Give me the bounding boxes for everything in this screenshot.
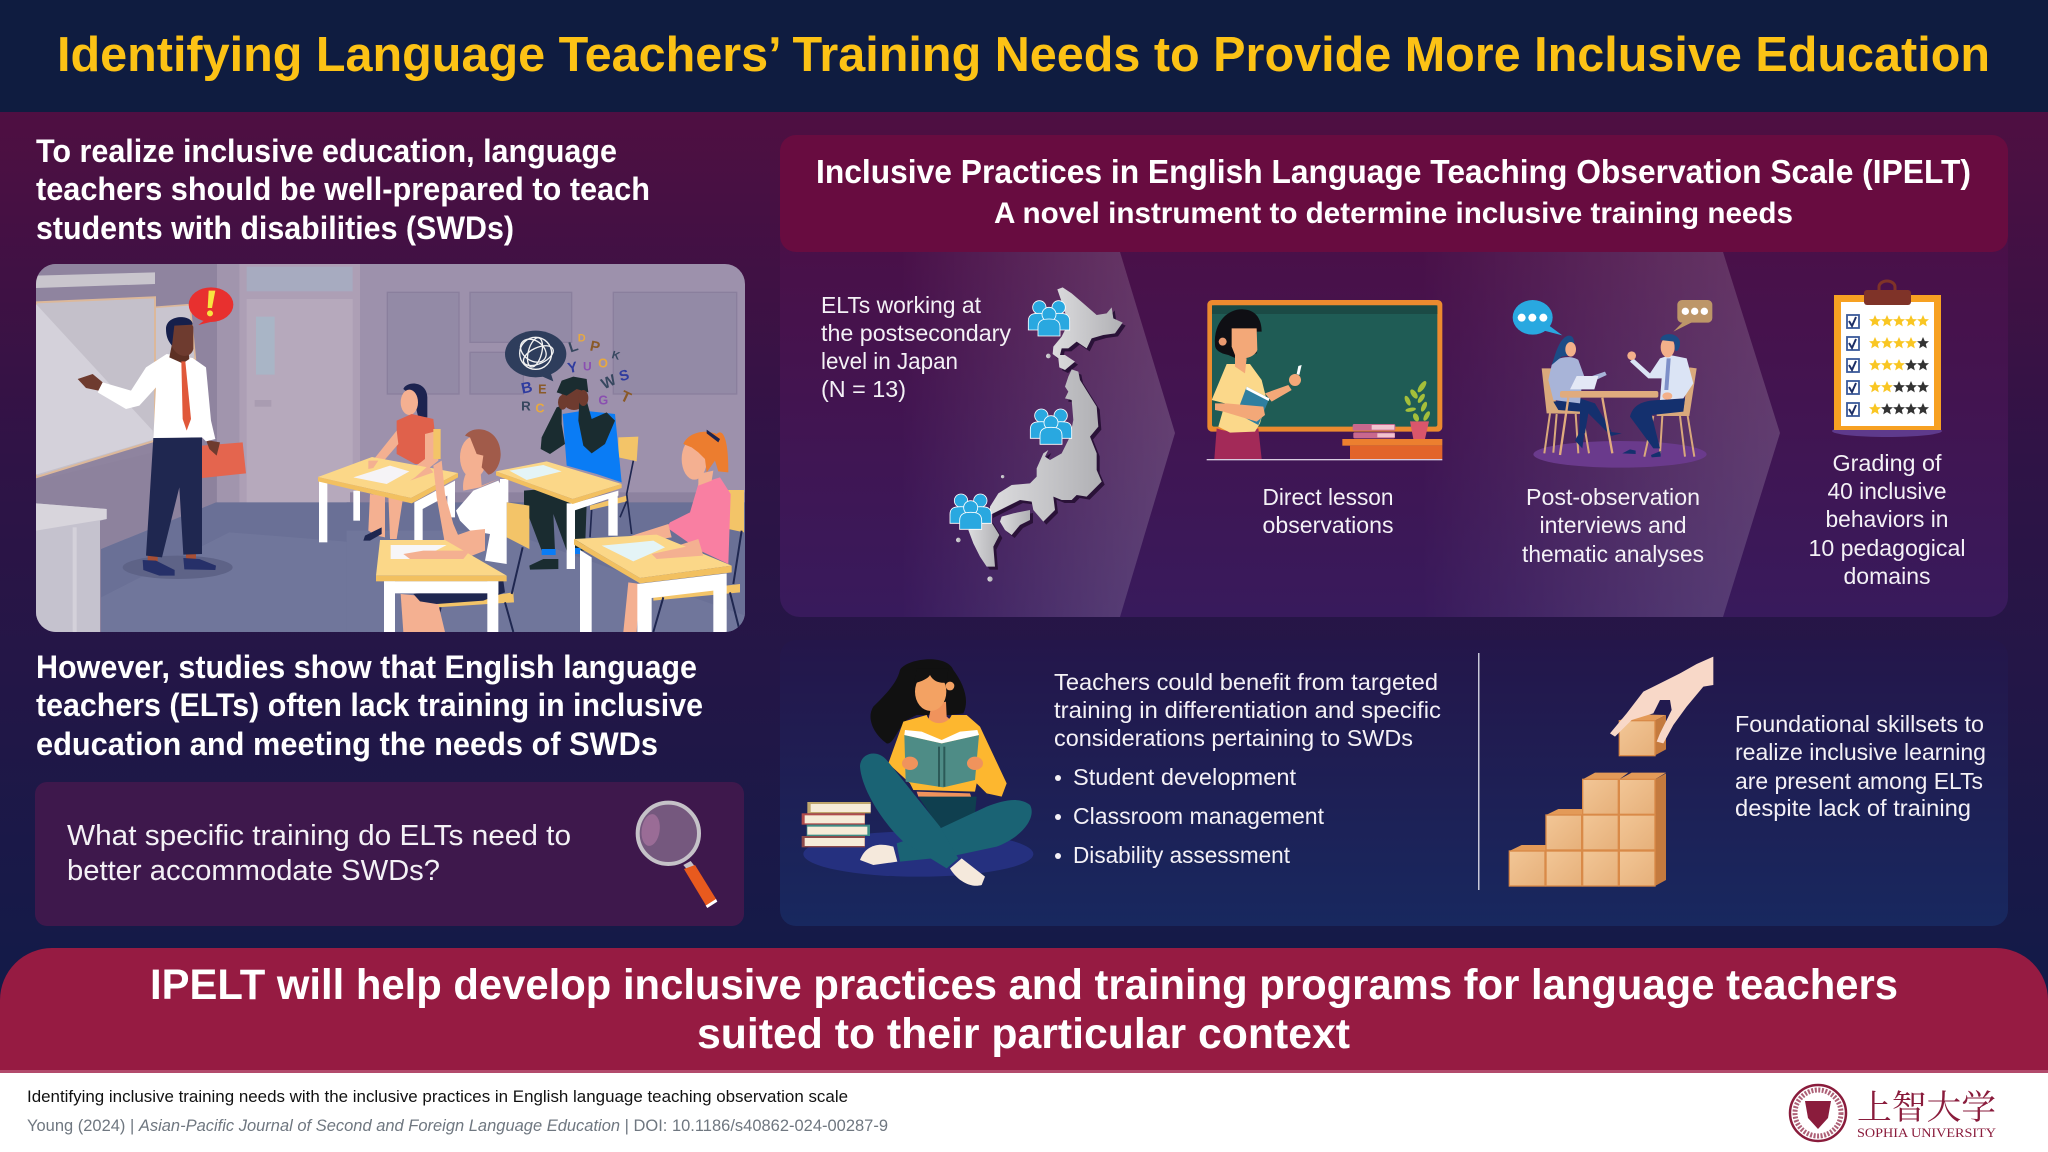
left intro text: teachers should be well-prepared to teach <box>36 171 650 207</box>
logo: Sophia University: SOPHIA UNIVERSITY <box>1857 1125 1997 1140</box>
conclusion text: IPELT will help develop inclusive practices and training programs for language teachers <box>150 961 1898 1009</box>
thought bubble with letters: R <box>521 399 531 414</box>
left intro text: students with disabilities (SWDs) <box>36 210 514 246</box>
thought bubble with letters: W <box>599 371 619 393</box>
label: interviews: interviews and <box>1540 512 1686 538</box>
text: participants: ELTs working at <box>821 292 981 318</box>
citation title: Identifying inclusive training needs with the inclusive practices in English language teaching observation scale <box>27 1087 848 1106</box>
conclusion banner <box>0 948 2048 1073</box>
heading line one: Inclusive Practices in English Language Teaching Observation Scale (IPELT) <box>816 153 1971 190</box>
label: interviews: Post-observation <box>1526 484 1700 510</box>
label: grading: 10 pedagogical <box>1808 535 1966 561</box>
text: foundational skillsets: realize inclusive learning <box>1735 739 1986 765</box>
thought bubble with letters: P <box>588 338 602 356</box>
panel: research question <box>35 782 744 926</box>
map of Japan with teacher icons <box>950 287 1126 582</box>
thought bubble with letters: G <box>598 394 608 408</box>
thought bubble with letters <box>505 331 634 416</box>
illustration: teacher at chalkboard <box>1207 300 1442 460</box>
bullet list: Disability assessment <box>1073 842 1290 868</box>
however text: education and meeting the needs of SWDs <box>36 726 658 762</box>
chair three <box>590 437 638 537</box>
desk two <box>376 540 507 635</box>
desk three <box>496 461 622 569</box>
text: training needs: training in differentiation and specific <box>1054 697 1441 723</box>
left intro text: To realize inclusive education, language <box>36 133 617 169</box>
text: foundational skillsets: despite lack of training <box>1735 795 1971 821</box>
label: grading: behaviors in <box>1826 506 1948 532</box>
text: participants: (N = 13) <box>821 376 906 402</box>
thought bubble with letters: S <box>618 367 631 385</box>
illustration: student reading <box>802 659 1033 886</box>
however text: teachers (ELTs) often lack training in inclusive <box>36 687 703 723</box>
alert speech bubble <box>189 287 233 325</box>
question text: better accommodate SWDs? <box>67 855 440 887</box>
thought bubble with letters: Y <box>566 360 579 377</box>
desk four <box>574 535 732 634</box>
panel: IPELT method <box>780 240 2008 617</box>
text: foundational skillsets: Foundational skillsets to <box>1735 711 1984 737</box>
illustration: interview <box>1513 300 1712 468</box>
student one <box>363 384 441 541</box>
label: grading: 40 inclusive <box>1828 478 1946 504</box>
panel: findings <box>780 640 2008 926</box>
icon: magnifying glass <box>638 803 717 908</box>
text: participants: level in Japan <box>821 348 958 374</box>
citation source: Young (2024) | Asian-Pacific Journal of Second and Foreign Language Education | DOI: 10.1186/s40862-024-00287-9 <box>27 1116 888 1135</box>
thought bubble with letters: U <box>583 359 592 373</box>
bullet list: Student development <box>1073 764 1296 790</box>
desk one <box>318 457 458 542</box>
label: interviews: thematic analyses <box>1522 541 1704 567</box>
thought bubble with letters: L <box>567 338 580 356</box>
thought bubble with letters: D <box>578 332 586 344</box>
label: grading: domains <box>1844 563 1930 589</box>
conclusion text: suited to their particular context <box>697 1010 1350 1058</box>
label: grading: Grading of <box>1832 450 1942 476</box>
heading line two: A novel instrument to determine inclusive training needs <box>994 197 1793 230</box>
thought bubble with letters: E <box>538 383 547 397</box>
thought bubble with letters: O <box>598 356 608 370</box>
student two <box>401 429 529 632</box>
label: lesson observations: Direct lesson <box>1262 484 1394 510</box>
text: participants: the postsecondary <box>821 320 1011 346</box>
icon: rating clipboard <box>1832 281 1942 437</box>
bullet list: Classroom management <box>1073 803 1324 829</box>
thought bubble with letters: K <box>610 349 621 363</box>
text: foundational skillsets: are present among ELTs <box>1735 768 1983 794</box>
question text: What specific training do ELTs need to <box>67 820 571 852</box>
student three <box>524 377 622 570</box>
label: lesson observations: observations <box>1262 512 1394 538</box>
logo: Sophia University: 上智大学 <box>1857 1080 1996 1129</box>
teacher figure <box>78 317 246 576</box>
thought bubble with letters: C <box>535 402 545 416</box>
illustration: wooden blocks and hand <box>1509 657 1713 886</box>
thought bubble with letters: T <box>618 388 634 407</box>
thought bubble with letters: B <box>520 379 534 398</box>
title: Identifying Language Teachers’ Training Needs to Provide More Inclusive Education <box>57 28 1990 82</box>
footer <box>0 1073 2048 1152</box>
text: training needs: Teachers could benefit from targeted <box>1054 669 1438 695</box>
panel: IPELT heading <box>780 135 2008 252</box>
classroom illustration <box>36 264 750 636</box>
text: training needs: considerations pertaining to SWDs <box>1054 725 1413 751</box>
header band <box>0 0 2048 112</box>
however text: However, studies show that English language <box>36 649 697 685</box>
logo: Sophia University <box>1790 1080 1997 1141</box>
bullet list <box>1055 764 1324 868</box>
student four <box>627 430 744 632</box>
